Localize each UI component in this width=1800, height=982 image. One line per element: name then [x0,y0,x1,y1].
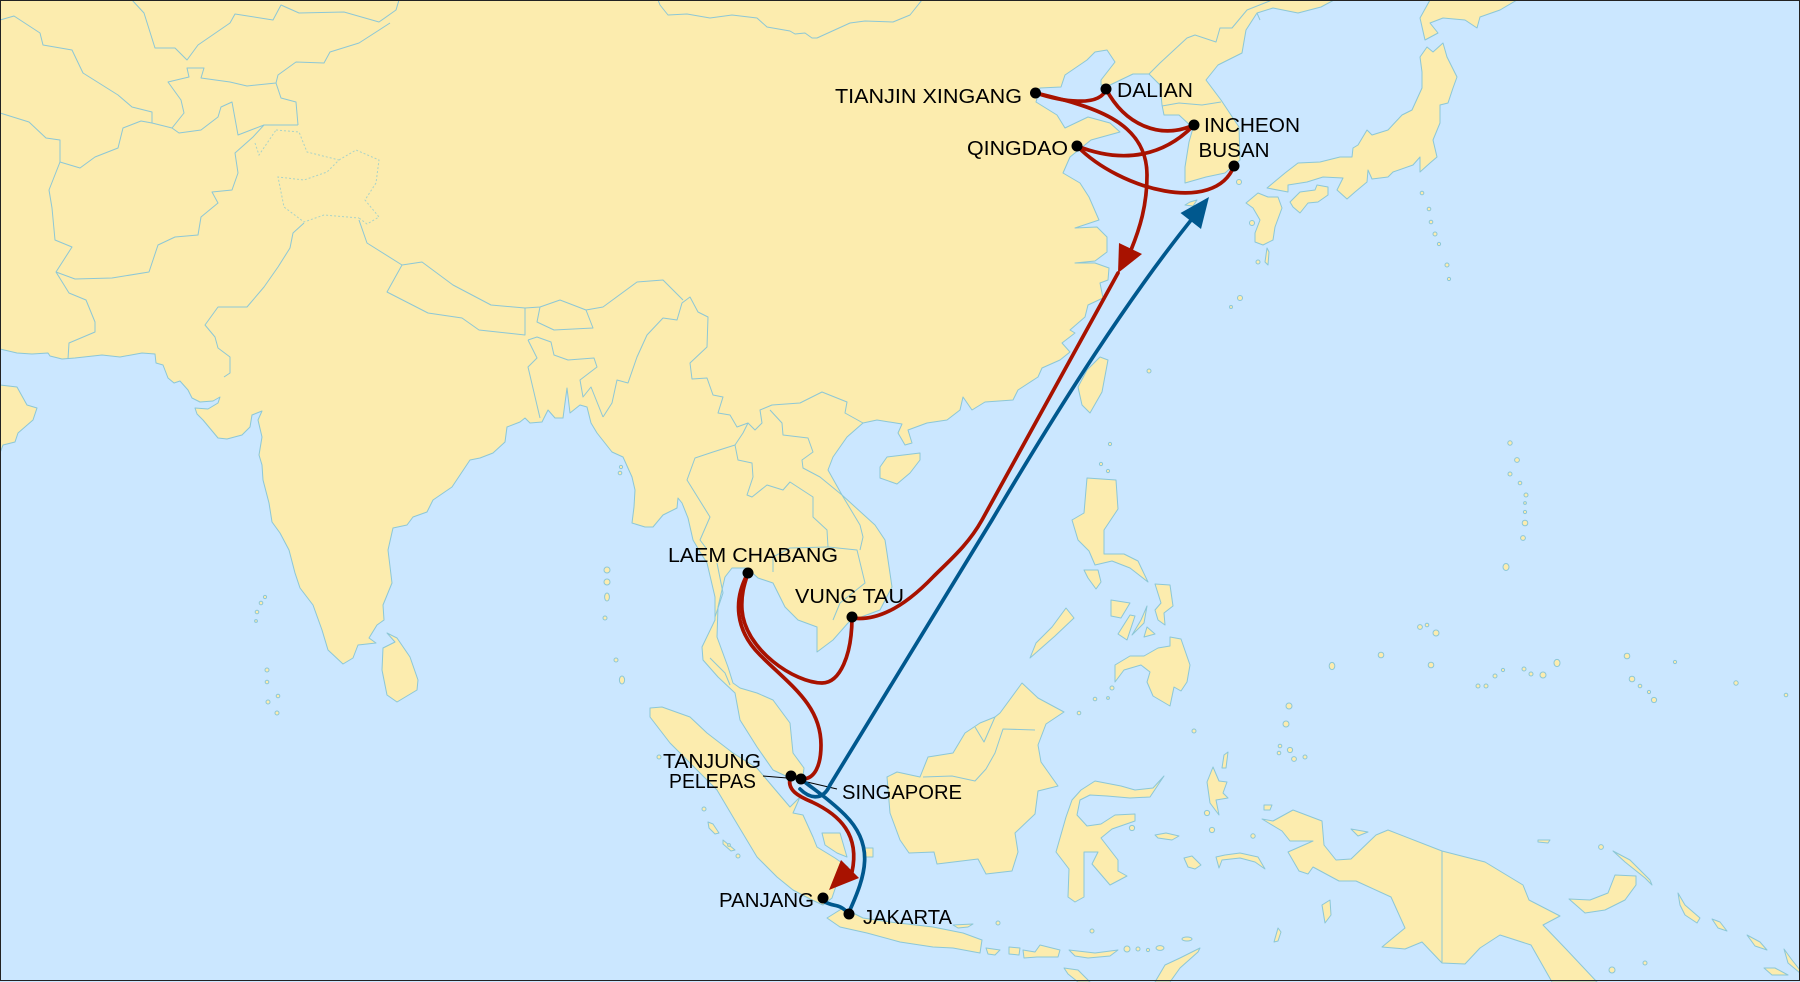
label: Tanjung Pelepas [663,751,761,793]
disputed borders [255,130,379,224]
label: Qingdao: QINGDAO [967,138,1068,160]
label: Tanjung Pelepas: TANJUNG [663,751,761,773]
red routes [739,89,1234,890]
label: Singapore: SINGAPORE [842,782,962,804]
label: Busan: BUSAN [1198,140,1270,162]
label: Laem Chabang: LAEM CHABANG [668,545,838,567]
port markers [742,84,1240,920]
label: Tianjin Xingang: TIANJIN XINGANG [835,86,1022,108]
country borders [0,0,1442,963]
label: Vung Tau: VUNG TAU [795,586,904,608]
label: Incheon: INCHEON [1204,115,1300,137]
blue routes [800,197,1209,914]
label: Jakarta: JAKARTA [863,907,953,929]
label: Dalian: DALIAN [1117,80,1193,102]
label: Panjang: PANJANG [719,890,814,912]
leader lines [763,776,837,789]
label: Tanjung Pelepas: PELEPAS [669,771,756,793]
